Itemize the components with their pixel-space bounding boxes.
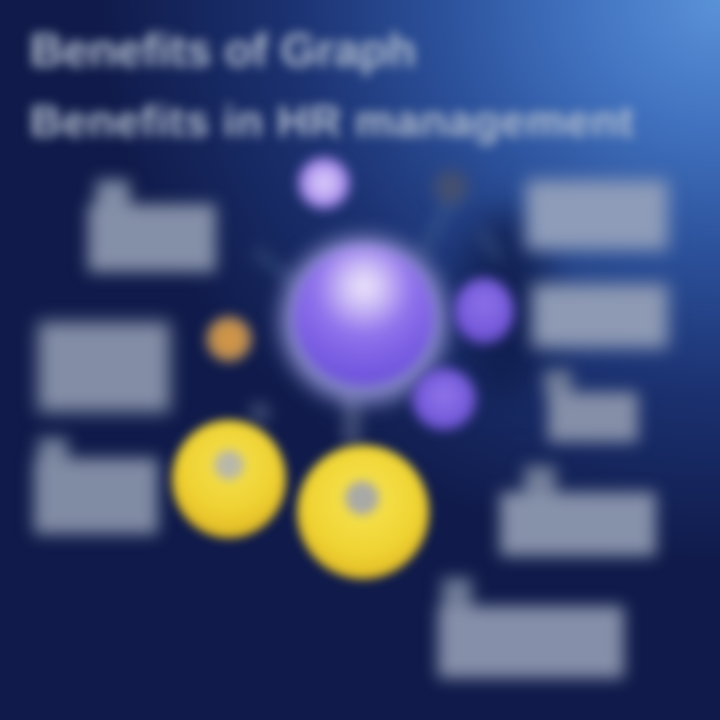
panel: right lower card (488, 456, 668, 568)
panel: upper middle right card (532, 284, 668, 348)
panel: lower middle right card (534, 361, 649, 453)
hub halo (280, 236, 448, 404)
icon: top purple node (298, 157, 350, 209)
icon: orange node (206, 316, 252, 362)
panel: top right card (526, 180, 668, 250)
dark halo right of hub (460, 210, 550, 400)
connector lines network (246, 211, 502, 446)
title line 1: Benefits of Graph (30, 24, 416, 76)
coin centre (345, 481, 379, 515)
icon: right purple satellite (454, 278, 514, 344)
icon: left yellow coin (164, 412, 294, 546)
icon: lower purple satellite (412, 368, 476, 430)
panel: bottom right card (427, 568, 635, 689)
icon: small dim node (434, 170, 468, 204)
panel: bottom left card (23, 428, 169, 545)
title line 2: Benefits in HR management (30, 97, 634, 146)
coin centre (214, 450, 244, 480)
icon: right yellow coin (289, 437, 437, 587)
hub sphere (294, 246, 434, 386)
panel: top left card (77, 170, 227, 283)
panel: middle left card (38, 322, 170, 412)
icon: central purple hub (266, 224, 459, 417)
